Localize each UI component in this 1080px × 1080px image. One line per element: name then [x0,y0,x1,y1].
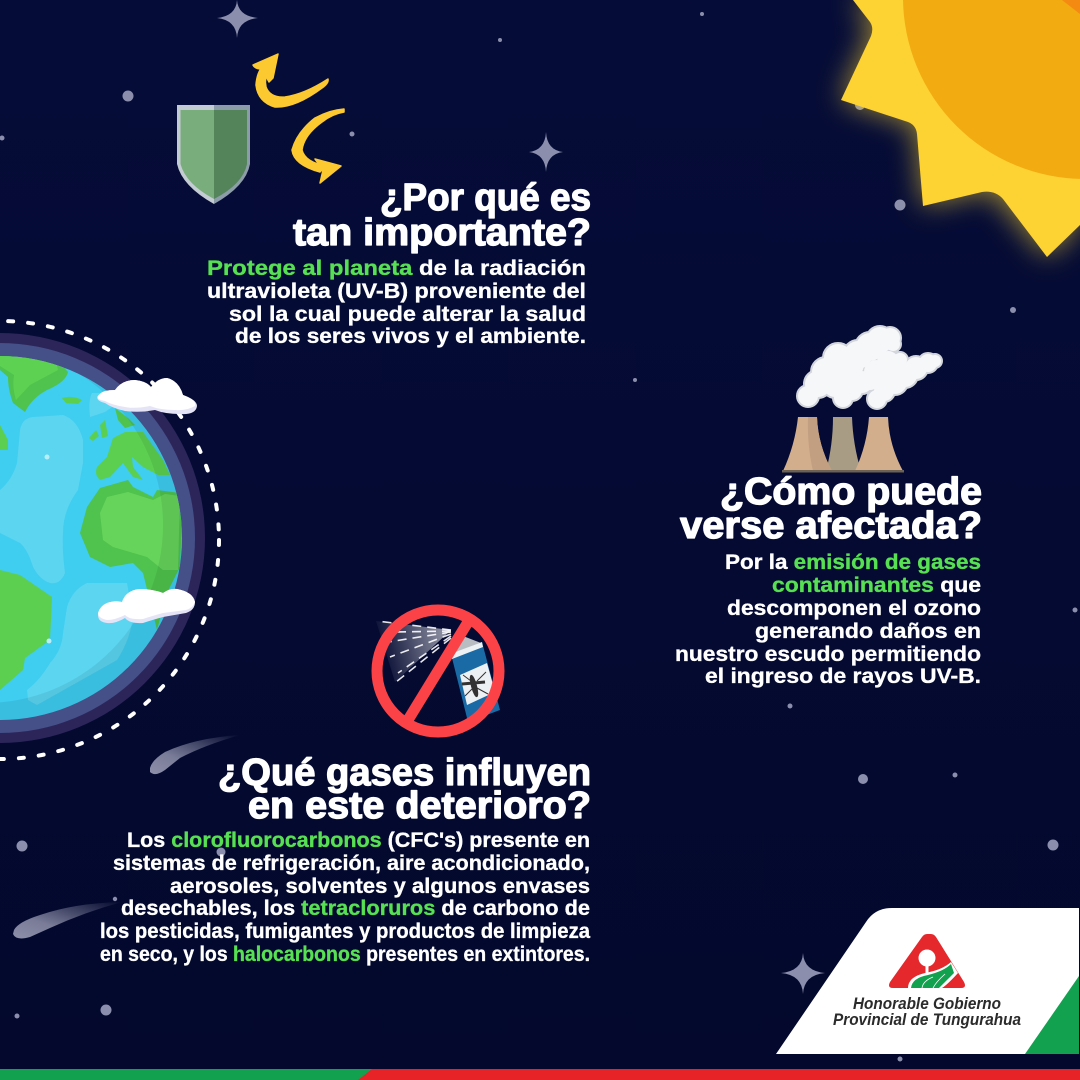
heading: ¿Por qué es [380,177,591,219]
text block: qué gases influyen [100,752,591,966]
body: descomponen el ozono [727,596,981,620]
cloud: top [97,378,197,414]
text block: por qué es importante [207,177,591,348]
text block: cómo puede verse afectada [675,471,982,688]
logo text: Provincial de Tungurahua [833,1010,1021,1029]
left tower [783,417,832,471]
ocean and continents [0,356,182,720]
body: de los seres vivos y el ambiente. [235,324,586,348]
middle tower [826,417,861,471]
heading: tan importante? [293,212,591,254]
globe [0,321,219,759]
icon: yellow arrows [253,54,344,183]
body [100,828,591,966]
comet: lower [13,902,122,938]
cloud: bottom [98,589,195,623]
body: ultravioleta (UV-B) proveniente del [207,279,586,303]
body: desechables, los tetracloruros de carbono de [121,896,590,920]
body: nuestro escudo permitiendo [675,642,981,666]
heading: ¿Qué gases influyen [218,752,591,794]
body [675,550,981,688]
body: sol la cual puede alterar la salud [229,302,586,326]
heading: verse afectada? [680,505,982,547]
body: los pesticidas, fumigantes y productos de limpieza [100,919,591,943]
sun [841,0,1080,257]
bottom bar [0,1069,1080,1080]
body: Los clorofluorocarbonos (CFC's) presente en [127,828,590,852]
body [207,256,586,348]
atmosphere rings [0,333,205,743]
heading [680,471,982,547]
icon: prohibited aerosol spray [376,610,500,732]
heading: en este deterioro? [248,785,591,827]
smoke [798,327,941,408]
icon: factory with smoke [782,327,941,472]
comet: upper [150,735,240,774]
dashed orbit [0,321,219,759]
heading [218,752,591,827]
star: lower right [781,953,825,994]
star: top [217,0,258,38]
mosquito [462,672,488,697]
icon: shield [177,105,250,204]
right tower [855,417,903,471]
body: aerosoles, solventes y algunos envases [170,874,590,898]
body: Por la emisión de gases [725,550,981,574]
body: el ingreso de rayos UV-B. [705,664,981,688]
heading: ¿Cómo puede [720,471,982,513]
prohibition sign [377,610,499,732]
logo emblem [889,934,965,988]
body: Protege al planeta de la radiación [207,256,586,280]
logo panel [776,908,1079,1054]
body: generando daños en [755,619,981,643]
logo text [833,994,1021,1029]
spray cloud [376,621,451,682]
heading [293,177,591,254]
can nozzle [452,632,482,654]
body: contaminantes que [772,573,981,597]
body: sistemas de refrigeración, aire acondicionado, [113,851,590,875]
logo text: Honorable Gobierno [853,994,1001,1013]
body: en seco, y los halocarbonos presentes en extintores. [100,942,590,966]
can body [451,642,500,722]
star: middle [529,132,563,172]
